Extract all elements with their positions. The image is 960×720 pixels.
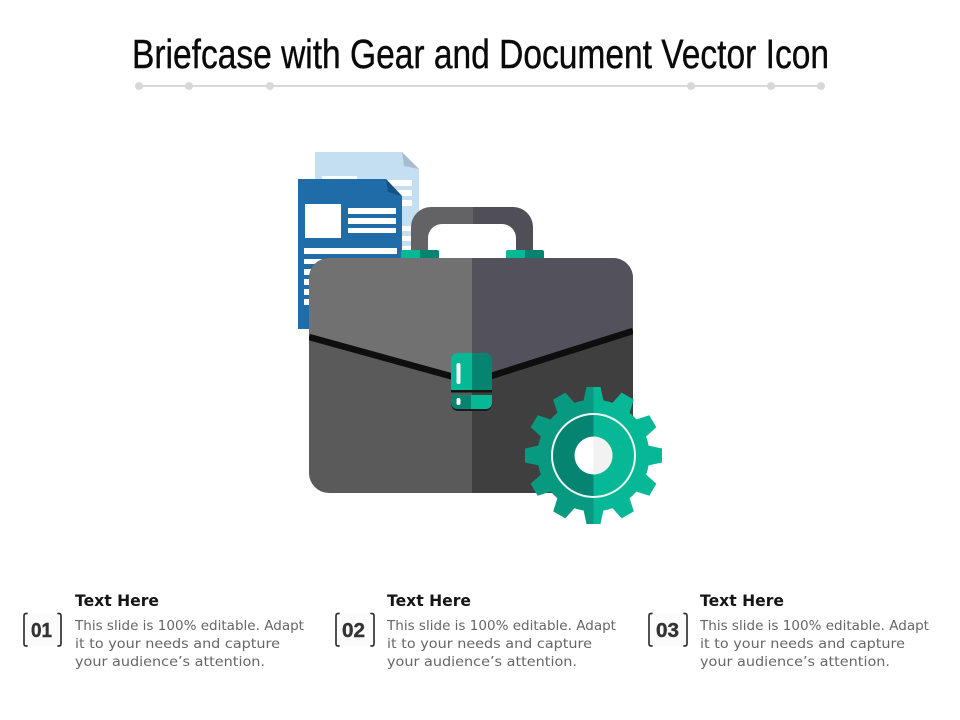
body text 01: This slide is 100% editable. Adapt — [74, 618, 304, 634]
body text 01: your audience’s attention. — [75, 654, 265, 670]
body text 02: it to your needs and capture — [387, 636, 592, 652]
number badge 03: 03 — [656, 620, 679, 642]
text block 03 — [649, 591, 929, 670]
icon: briefcase handle — [411, 207, 533, 250]
heading 02: Text Here — [387, 591, 471, 610]
heading 01: Text Here — [75, 591, 159, 610]
number badge 01: 01 — [31, 620, 52, 642]
number badge 01 — [24, 614, 61, 646]
icon: back document — [315, 152, 419, 300]
body text 01: it to your needs and capture — [75, 636, 280, 652]
heading 03: Text Here — [700, 591, 784, 610]
number badge 02: 02 — [342, 620, 365, 642]
body text 02 — [386, 618, 616, 670]
icon: briefcase body — [309, 258, 633, 493]
body text 01 — [74, 618, 304, 670]
title divider with dots — [135, 82, 825, 90]
icon: front document — [298, 179, 402, 329]
icon: briefcase with gear and documents — [298, 152, 662, 524]
body text 03: This slide is 100% editable. Adapt — [699, 618, 929, 634]
number badge 03 — [649, 614, 687, 646]
number badge 02 — [336, 614, 374, 646]
body text 02: your audience’s attention. — [387, 654, 577, 670]
icon: briefcase lock — [451, 353, 492, 411]
body text 03: your audience’s attention. — [700, 654, 890, 670]
title: Briefcase with Gear and Document Vector Icon — [132, 31, 829, 77]
icon: handle clasps — [401, 250, 544, 258]
icon: gear — [525, 387, 662, 524]
body text 02: This slide is 100% editable. Adapt — [386, 618, 616, 634]
body text 03 — [699, 618, 929, 670]
text block 02 — [336, 591, 616, 670]
body text 03: it to your needs and capture — [700, 636, 905, 652]
text block 01 — [24, 591, 304, 670]
